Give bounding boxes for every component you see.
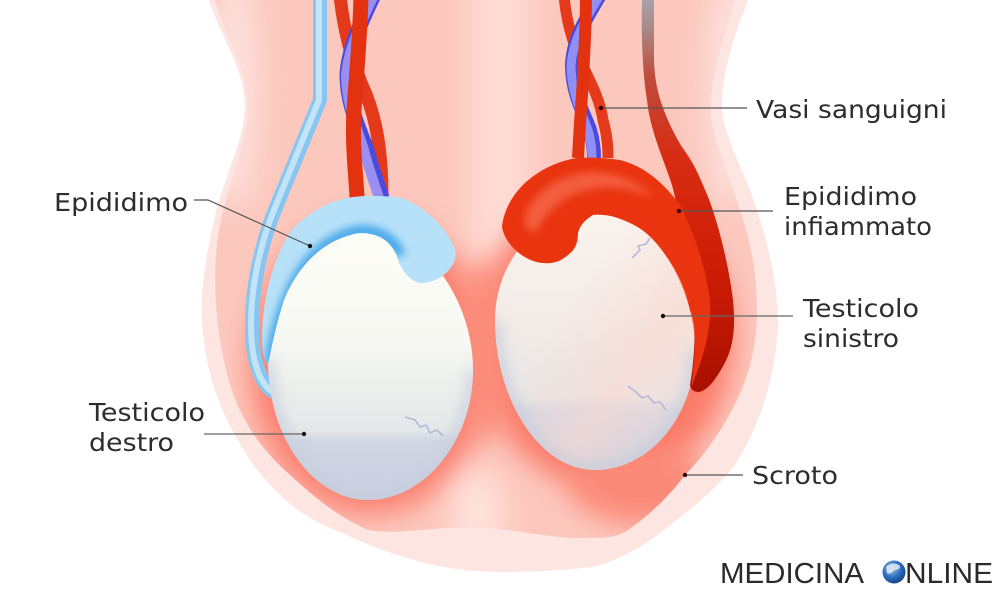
label: Epididimo infiammato	[677, 182, 932, 241]
label: Testicolo sinistro: sinistro	[803, 324, 899, 353]
watermark: MEDICINA ONLINE	[720, 558, 993, 589]
icon: globe	[882, 560, 906, 584]
label: Testicolo destro: destro	[89, 428, 174, 457]
label: Vasi sanguigni: Vasi sanguigni	[756, 95, 947, 124]
small veins right	[628, 238, 666, 410]
label: Epididimo: Epididimo	[54, 188, 188, 217]
label: Epididimo infiammato: infiammato	[784, 212, 932, 241]
label: Epididimo infiammato: Epididimo	[784, 182, 917, 211]
scrotum outer pale layer	[202, 0, 778, 572]
right blood vessels	[564, 0, 608, 158]
small vein left	[405, 417, 443, 436]
right vas deferens, inflamed	[642, 0, 734, 392]
label: Scroto	[683, 461, 838, 490]
label: Testicolo destro	[88, 398, 306, 457]
label: Testicolo sinistro: Testicolo	[802, 294, 919, 323]
right epididymis, inflamed	[502, 158, 710, 388]
label: Vasi sanguigni	[599, 95, 947, 124]
label: Testicolo sinistro	[661, 294, 919, 353]
left blood vessels	[340, 0, 382, 198]
label: Testicolo destro: Testicolo	[88, 398, 205, 427]
scrotum inner layer	[215, 0, 757, 538]
label: Epididimo	[54, 188, 312, 248]
label: Scroto: Scroto	[752, 461, 838, 490]
right testicle	[495, 210, 695, 470]
left epididymis	[262, 196, 456, 365]
left vas deferens	[251, 0, 320, 391]
left testicle	[268, 232, 473, 500]
